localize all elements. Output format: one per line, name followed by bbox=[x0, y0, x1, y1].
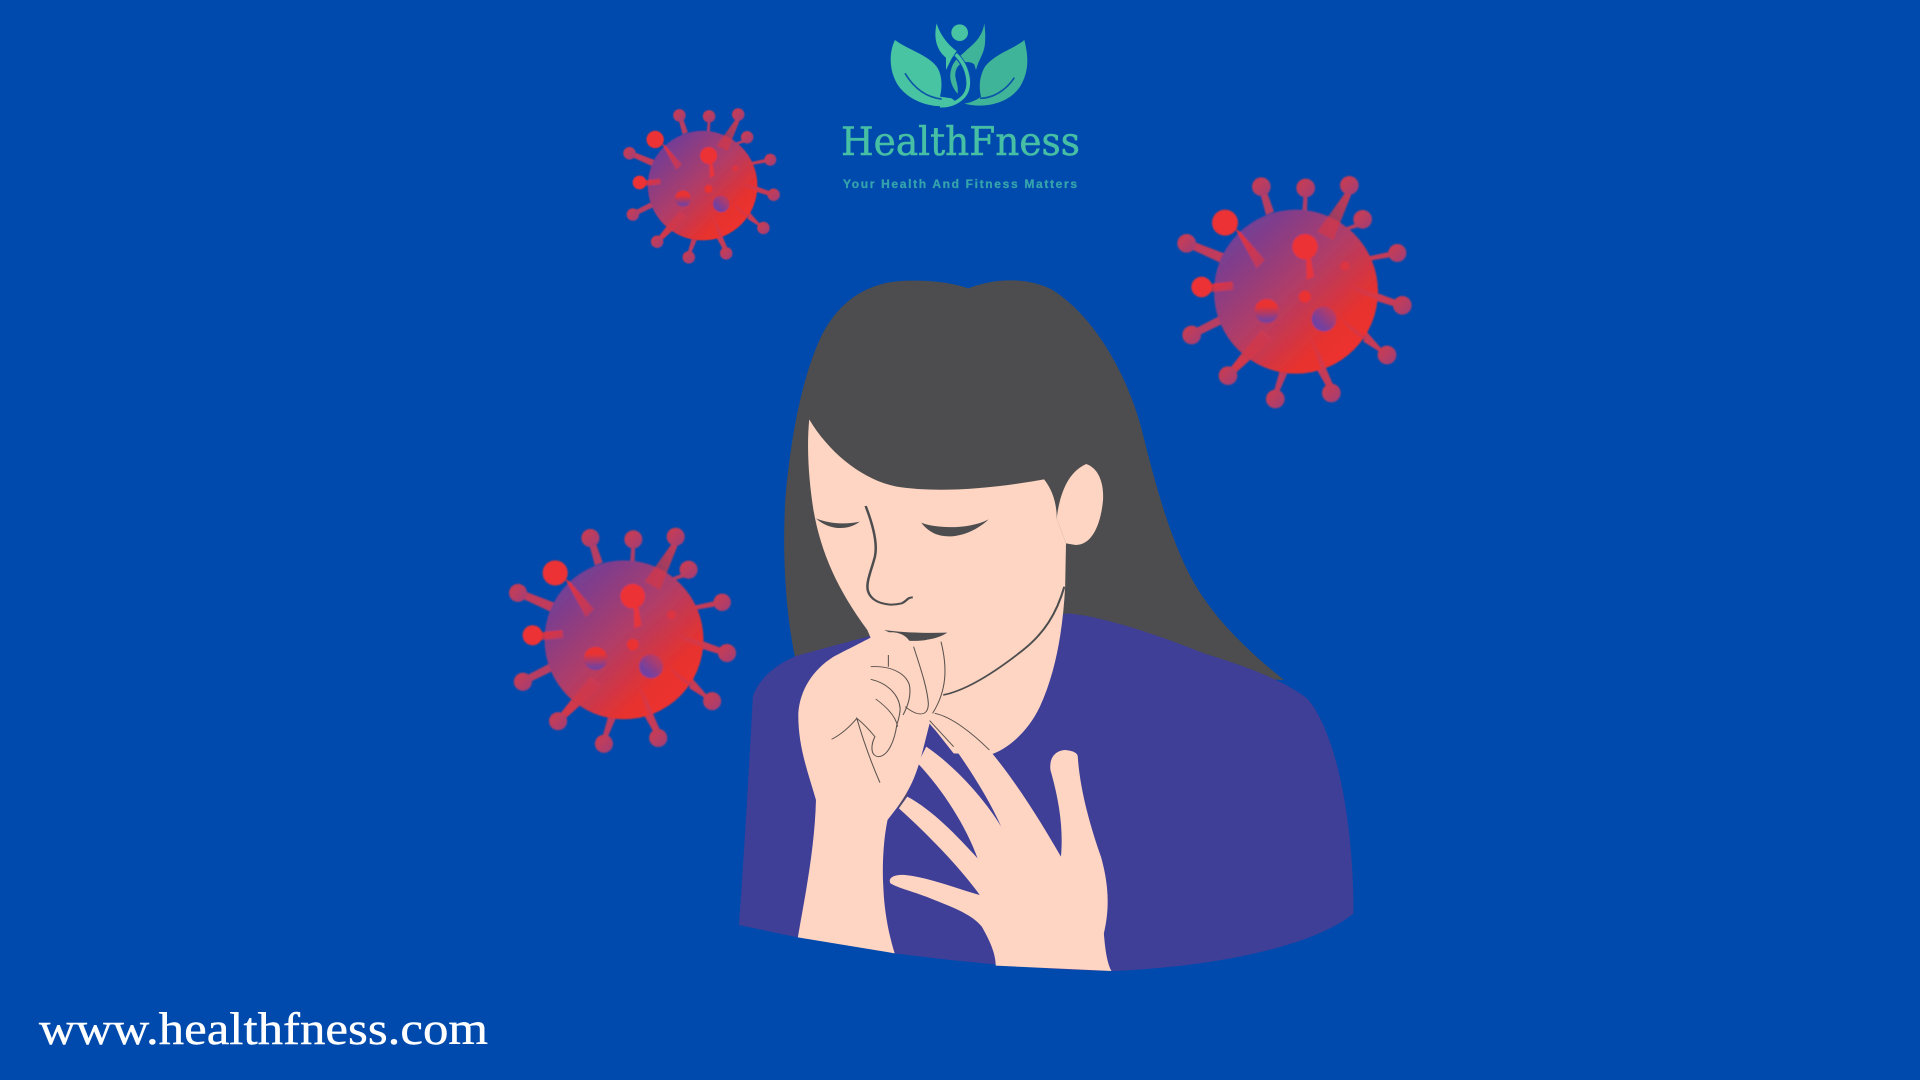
virus: top left small bbox=[623, 108, 780, 264]
virus: top right large bbox=[1177, 176, 1412, 408]
eyes, nose and jaw bbox=[816, 506, 1064, 695]
open hand on chest bbox=[890, 713, 1111, 971]
logo name: HealthFness bbox=[841, 120, 1080, 165]
website url: www.healthfness.com bbox=[39, 1003, 488, 1054]
logo tagline: Your Health And Fitness Matters bbox=[843, 177, 1077, 191]
virus: lower left bbox=[509, 528, 736, 753]
torso: blue top bbox=[739, 613, 1353, 971]
face and neck bbox=[808, 419, 1066, 755]
raised fist and forearm bbox=[798, 632, 947, 953]
icon: leaves and figure bbox=[891, 23, 1027, 106]
logo: HealthFness bbox=[841, 23, 1080, 191]
illustration: coughing woman bbox=[739, 280, 1353, 971]
ear bbox=[1057, 464, 1103, 545]
hair bbox=[784, 280, 1284, 680]
